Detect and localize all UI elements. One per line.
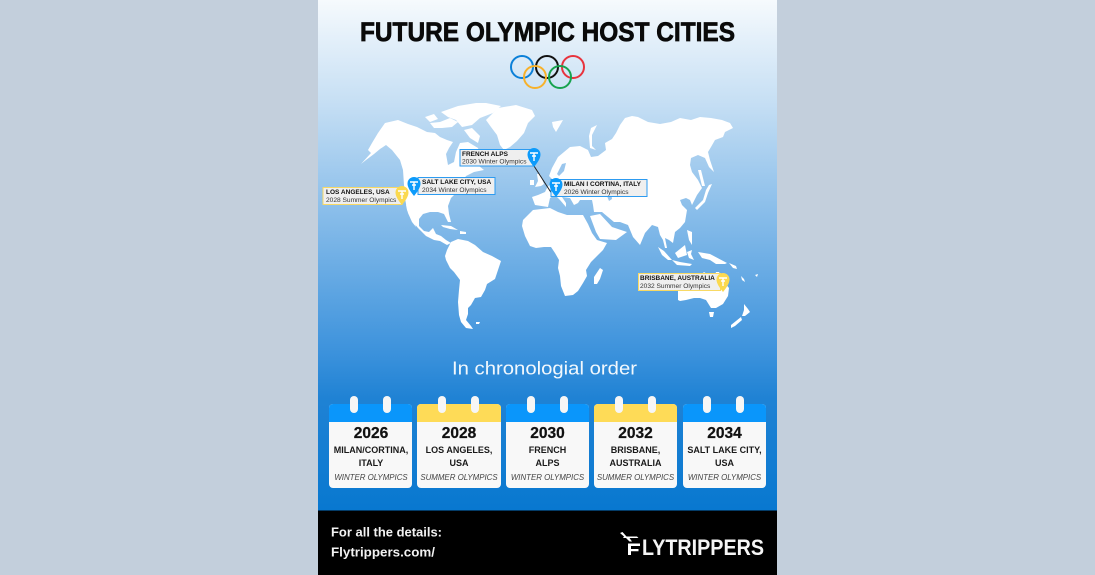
card: 2028: SUMMER OLYMPICS	[420, 473, 498, 482]
card: 2032: AUSTRALIA	[610, 458, 662, 468]
Greenland	[486, 105, 535, 150]
card: 2034: 2034	[707, 425, 742, 442]
callout: Brisbane	[638, 273, 730, 292]
Baja California	[406, 205, 416, 227]
callout: Brisbane: 2032 Summer Olympics	[640, 283, 711, 290]
card: 2028: 2028	[442, 425, 477, 442]
card: 2034: SALT LAKE CITY,	[687, 445, 762, 455]
Arabian peninsula	[590, 214, 627, 240]
card: 2030: 2030	[530, 425, 565, 442]
callout: Brisbane: BRISBANE, AUSTRALIA	[640, 275, 715, 282]
Great Britain and Ireland	[530, 174, 544, 187]
card: 2030	[506, 396, 589, 488]
card: 2032: SUMMER OLYMPICS	[597, 473, 675, 482]
Australia	[678, 272, 729, 308]
card: 2026: WINTER OLYMPICS	[334, 473, 408, 482]
world map	[361, 103, 758, 329]
Iceland	[500, 150, 512, 157]
Japan and Sakhalin	[695, 170, 712, 210]
card: 2030: WINTER OLYMPICS	[511, 473, 585, 482]
card: 2032: BRISBANE,	[611, 445, 660, 455]
Pacific islands	[741, 274, 758, 282]
card: 2028: LOS ANGELES,	[426, 445, 492, 455]
card: 2032	[594, 396, 677, 488]
callout: Salt Lake City: SALT LAKE CITY, USA	[422, 179, 492, 186]
Canadian Arctic islands	[425, 103, 501, 143]
card: 2028	[417, 396, 501, 488]
footer call to action: For all the details:	[331, 524, 442, 540]
callout: Milan Cortina: 2026 Winter Olympics	[564, 189, 629, 196]
logo: Flytrippers: LYTRIPPERS	[642, 535, 764, 560]
card: 2034: WINTER OLYMPICS	[688, 473, 762, 482]
logo: Flytrippers	[620, 532, 764, 560]
callout: Los Angeles	[323, 186, 408, 205]
footer call to action	[331, 524, 442, 560]
callout: French Alps: FRENCH ALPS	[462, 151, 509, 158]
callout: French Alps: 2030 Winter Olympics	[462, 158, 527, 166]
callout: Milan Cortina: MILAN I CORTINA, ITALY	[564, 181, 642, 188]
callout: Milan Cortina	[550, 178, 647, 197]
card: 2032: 2032	[618, 425, 653, 442]
card: 2028: USA	[449, 458, 469, 468]
card: 2026: 2026	[354, 425, 389, 442]
footer call to action: Flytrippers.com/	[331, 544, 435, 560]
Caribbean islands	[441, 225, 466, 234]
Svalbard and Novaya Zemlya	[552, 120, 597, 150]
card: 2034	[683, 396, 766, 488]
Africa	[522, 208, 607, 296]
callout: Salt Lake City	[408, 177, 495, 196]
poster gradient panel	[318, 0, 777, 511]
footer	[318, 510, 777, 575]
card: 2026: MILAN/CORTINA,	[334, 445, 408, 455]
callout: Los Angeles: LOS ANGELES, USA	[326, 189, 390, 196]
Tasmania	[709, 312, 714, 317]
callout: French Alps	[460, 148, 540, 167]
connector line: French Alps	[534, 166, 552, 194]
card: 2026	[329, 396, 412, 488]
callout: Salt Lake City: 2034 Winter Olympics	[422, 187, 487, 194]
Falkland island	[476, 322, 480, 324]
Baltic and Black seas	[557, 163, 612, 201]
subheading: In chronologial order	[452, 358, 637, 378]
icon: olympic rings	[511, 56, 584, 88]
callout: Los Angeles: 2028 Summer Olympics	[326, 197, 397, 204]
calendar cards	[329, 396, 766, 488]
New Zealand	[731, 304, 750, 328]
title: FUTURE OLYMPIC HOST CITIES	[360, 17, 735, 47]
card: 2030: ALPS	[535, 458, 560, 468]
Madagascar	[594, 268, 603, 284]
card: 2030: FRENCH	[529, 445, 566, 455]
Southeast Asia islands	[658, 230, 737, 269]
card: 2034: USA	[715, 458, 734, 468]
Eurasia	[532, 116, 733, 248]
North and Central America	[361, 120, 484, 245]
card: 2026: ITALY	[359, 458, 383, 468]
South America	[445, 239, 501, 329]
